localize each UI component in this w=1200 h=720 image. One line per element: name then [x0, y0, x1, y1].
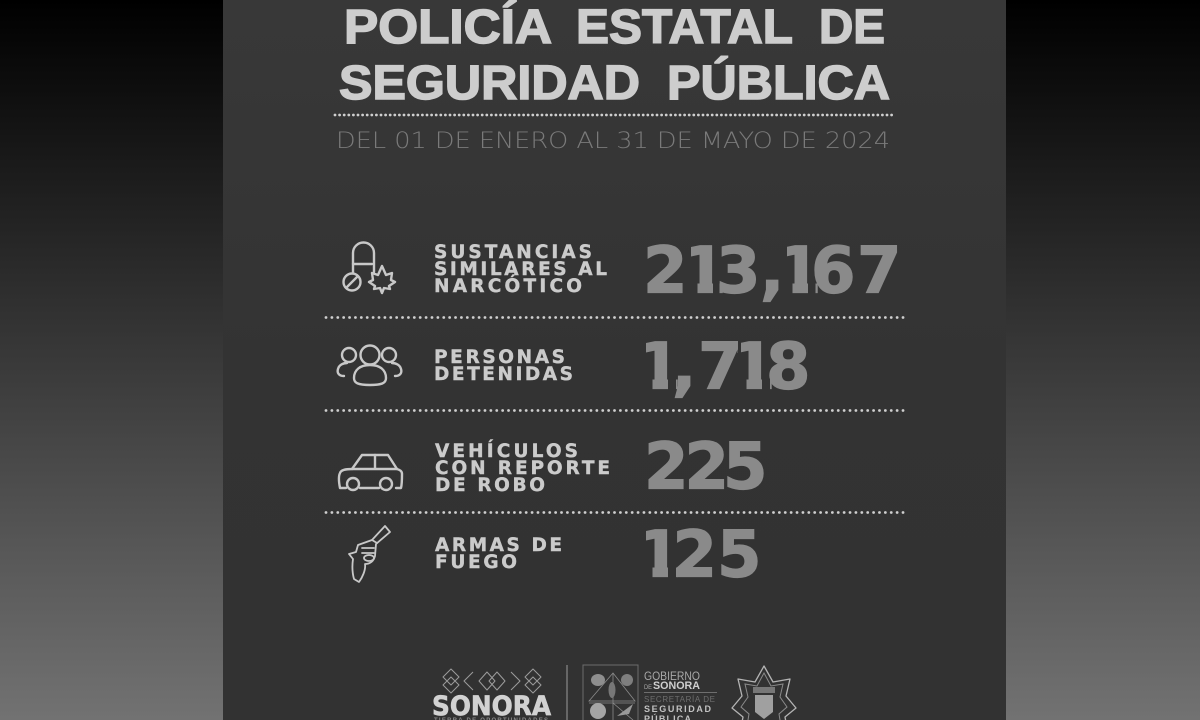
title: DE: [819, 1, 885, 54]
label: armas: ARMAS DE: [435, 535, 562, 556]
icon: revolver: [349, 526, 390, 582]
text: gobierno de sonora: GOBIERNO: [644, 671, 700, 683]
text: gobierno de sonora: [644, 671, 700, 692]
title: POLICÍA: [344, 0, 552, 54]
text: secretaria de seguridad publica: [644, 695, 715, 720]
row: personas: [336, 340, 808, 398]
row: sustancias: [342, 241, 897, 302]
logo: Sonora: [432, 669, 551, 720]
icon: pill and leaf: [344, 242, 395, 293]
label: vehiculos: VEHÍCULOS: [435, 440, 578, 462]
title: SEGURIDAD: [339, 57, 640, 110]
text: secretaria de seguridad publica: SEGURIDAD: [644, 704, 712, 714]
label: personas: [434, 347, 573, 385]
text: gobierno de sonora: SONORA: [653, 680, 700, 692]
label: vehiculos: DE ROBO: [435, 475, 545, 496]
subtitle: date range: DEL 01 DE ENERO AL 31 DE MAYO DE 2024: [336, 128, 890, 154]
icon: group of people: [338, 346, 401, 385]
number: personas: 1,718: [637, 330, 811, 404]
text: gobierno de sonora: DE: [644, 685, 652, 691]
icon: car: [339, 455, 402, 490]
label: sustancias: NARCÓTICO: [434, 275, 582, 297]
label: vehiculos: [435, 440, 610, 496]
panel: dark poster: [223, 0, 1006, 720]
logo: shield: [583, 665, 638, 720]
label: personas: PERSONAS: [434, 347, 565, 368]
title: ESTATAL: [576, 1, 793, 54]
number: vehiculos: 225: [644, 430, 768, 504]
number: sustancias: 213,167: [643, 234, 902, 308]
title: PÚBLICA: [667, 55, 890, 110]
number: armas: 125: [637, 518, 762, 592]
title: [339, 0, 890, 110]
label: sustancias: [434, 242, 607, 297]
row: vehiculos: [338, 439, 764, 492]
label: armas: FUEGO: [435, 552, 517, 573]
text: secretaria de seguridad publica: SECRETARÍA DE: [644, 695, 715, 704]
logo: police star: [732, 666, 796, 720]
label: sustancias: SUSTANCIAS: [434, 242, 592, 263]
label: vehiculos: CON REPORTE: [435, 458, 610, 479]
row: armas: [348, 525, 758, 583]
label: armas: [435, 535, 562, 573]
footer logos: [432, 665, 796, 720]
label: personas: DETENIDAS: [434, 364, 573, 385]
label: sustancias: SIMILARES AL: [434, 259, 607, 280]
